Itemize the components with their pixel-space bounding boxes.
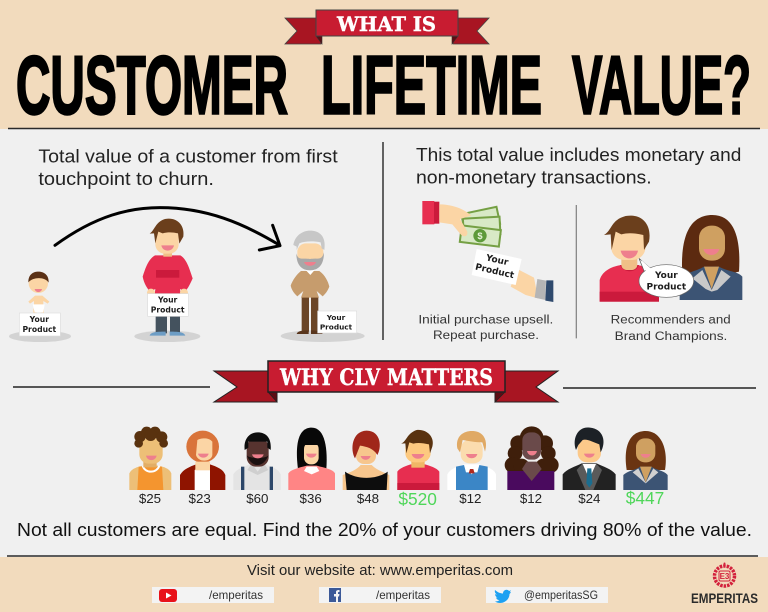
social: twitter xyxy=(486,587,608,603)
customer: $36: $36 xyxy=(300,491,322,506)
customer: $24: $24 xyxy=(578,491,601,506)
illustration: man and woman talking xyxy=(600,215,742,302)
speech bubble xyxy=(639,258,694,297)
text: website: Visit our website at: www.emperitas.com xyxy=(247,563,513,579)
customer: $520 xyxy=(397,430,439,509)
sign: adult xyxy=(148,294,188,316)
title xyxy=(16,38,751,132)
illustration: hand with money xyxy=(422,201,501,247)
illustration: hand with product card xyxy=(472,249,553,302)
text: definition: touchpoint to churn. xyxy=(38,168,214,189)
illustration: hand with product card: Your xyxy=(484,253,510,268)
banner: what is xyxy=(285,10,489,44)
caption: monetary xyxy=(418,312,553,342)
footer band xyxy=(0,557,768,612)
customer: $12 blond xyxy=(447,431,496,506)
sign: baby xyxy=(19,313,60,336)
header band xyxy=(0,0,768,129)
customer: $48 xyxy=(343,431,389,506)
panel: transactions xyxy=(416,144,742,343)
text: definition: Total value of a customer from first xyxy=(38,145,338,166)
social: facebook: /emperitas xyxy=(376,588,430,602)
sign: old man xyxy=(318,311,357,333)
sign: baby: Your xyxy=(29,315,49,324)
logo: emperitas: E3 xyxy=(720,572,730,581)
figure: old man xyxy=(291,231,357,334)
customer: $12 curly hair xyxy=(505,426,559,506)
customer: $25: $25 xyxy=(139,491,161,506)
sign: adult: Your xyxy=(157,295,178,304)
customer: $48: $48 xyxy=(357,491,379,506)
customers row, left group xyxy=(129,427,389,506)
caption: non-monetary xyxy=(611,313,731,343)
customer: $12 curly hair: $12 xyxy=(520,491,542,506)
text: definition xyxy=(38,145,338,189)
customers row, right group xyxy=(397,426,668,509)
figure: adult man xyxy=(143,219,193,336)
customer: $447: $447 xyxy=(626,488,664,508)
panel: customer journey xyxy=(9,145,365,342)
text: pareto statement: Not all customers are equal. Find the 20% of your customers driving 80% of the value. xyxy=(17,519,752,540)
caption: monetary: Repeat purchase. xyxy=(433,328,539,342)
logo: emperitas xyxy=(691,562,758,606)
customer: $24 xyxy=(563,427,616,506)
caption: monetary: Initial purchase upsell. xyxy=(418,312,553,326)
customer: $23 xyxy=(180,431,225,506)
divider xyxy=(574,205,578,338)
customer: $36 xyxy=(288,428,335,506)
banner: why clv matters: WHY CLV MATTERS xyxy=(279,365,493,391)
text: transactions intro xyxy=(416,144,741,187)
social: facebook xyxy=(319,587,441,603)
title: LIFETIME xyxy=(321,38,542,132)
customer: $60: $60 xyxy=(246,491,268,506)
illustration: hand with money: $ xyxy=(477,231,483,241)
customer: $520: $520 xyxy=(398,489,437,509)
sign: old man: Your xyxy=(326,313,346,322)
social: youtube xyxy=(152,587,274,603)
vertical divider xyxy=(382,142,384,340)
shadows xyxy=(9,330,365,342)
social: youtube: /emperitas xyxy=(209,588,263,602)
title: CUSTOMER xyxy=(16,38,288,132)
sign: baby: Product xyxy=(22,325,57,334)
illustration: hand with product card: Product xyxy=(474,263,516,281)
banner: what is: WHAT IS xyxy=(336,12,436,36)
social: twitter: @emperitasSG xyxy=(524,588,598,602)
arrow: lifecycle xyxy=(55,208,280,250)
customer: $447 xyxy=(623,431,668,508)
customer: $23: $23 xyxy=(189,491,211,506)
figure: baby xyxy=(19,272,60,336)
speech bubble: Product xyxy=(647,282,687,292)
caption: non-monetary: Brand Champions. xyxy=(615,329,727,343)
customer: $12 blond: $12 xyxy=(459,491,481,506)
caption: non-monetary: Recommenders and xyxy=(611,313,731,327)
text: transactions intro: This total value includes monetary and xyxy=(416,144,741,165)
sign: adult: Product xyxy=(151,305,185,314)
text: transactions intro: non-monetary transactions. xyxy=(416,166,652,187)
customer: $25 xyxy=(129,427,171,506)
customer: $60 xyxy=(233,432,281,506)
banner: why clv matters xyxy=(214,361,558,402)
sign: old man: Product xyxy=(320,322,353,331)
speech bubble: Your xyxy=(654,271,678,281)
